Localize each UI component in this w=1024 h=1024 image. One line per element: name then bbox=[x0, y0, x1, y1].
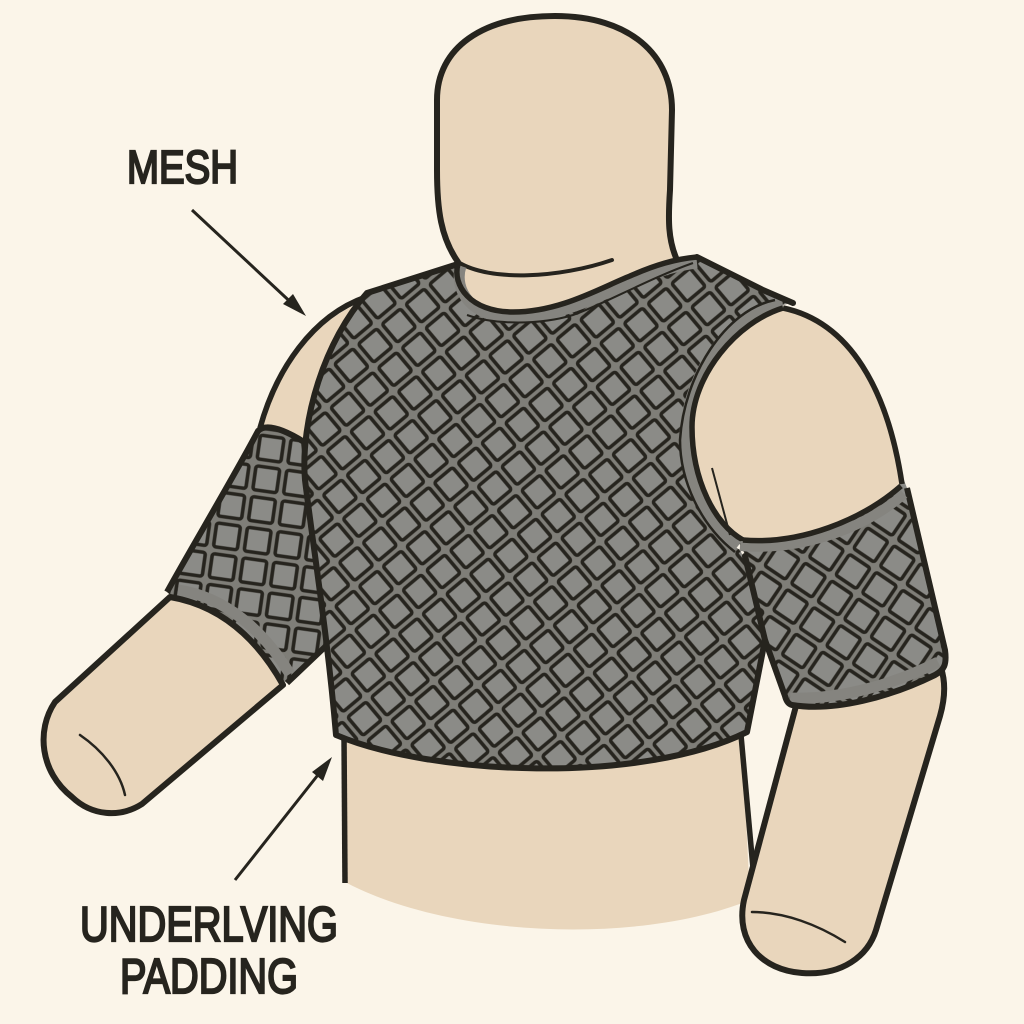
mesh vest bbox=[304, 257, 793, 768]
torso bbox=[344, 735, 753, 929]
sleeve cuff band bbox=[178, 590, 290, 674]
right forearm bbox=[742, 668, 944, 973]
label: underlying padding: UNDERLVING bbox=[80, 898, 338, 952]
head and neck bbox=[437, 16, 700, 340]
label: mesh: MESH bbox=[127, 141, 238, 193]
sleeve cuff band bbox=[790, 662, 938, 698]
neck crease bbox=[458, 260, 612, 275]
upper cuff band bbox=[740, 494, 904, 547]
right mesh sleeve bbox=[735, 470, 946, 707]
armpit crease bbox=[712, 468, 730, 535]
forearm fold bbox=[752, 912, 845, 942]
left mesh sleeve bbox=[167, 427, 327, 683]
right upper arm bbox=[692, 308, 904, 547]
armhole band bbox=[686, 306, 783, 546]
left upper arm bbox=[260, 297, 366, 450]
collar band bbox=[459, 263, 697, 318]
arrow: mesh bbox=[192, 210, 306, 316]
arrow: underlying padding bbox=[235, 757, 332, 880]
label: underlying padding bbox=[80, 898, 338, 1004]
collar inner line bbox=[467, 263, 693, 322]
label: underlying padding: PADDING bbox=[120, 950, 298, 1004]
forearm fold bbox=[80, 735, 125, 795]
vest outline bbox=[304, 257, 793, 768]
left forearm bbox=[44, 597, 283, 813]
collar line bbox=[457, 257, 697, 312]
armhole outer line bbox=[680, 300, 775, 552]
